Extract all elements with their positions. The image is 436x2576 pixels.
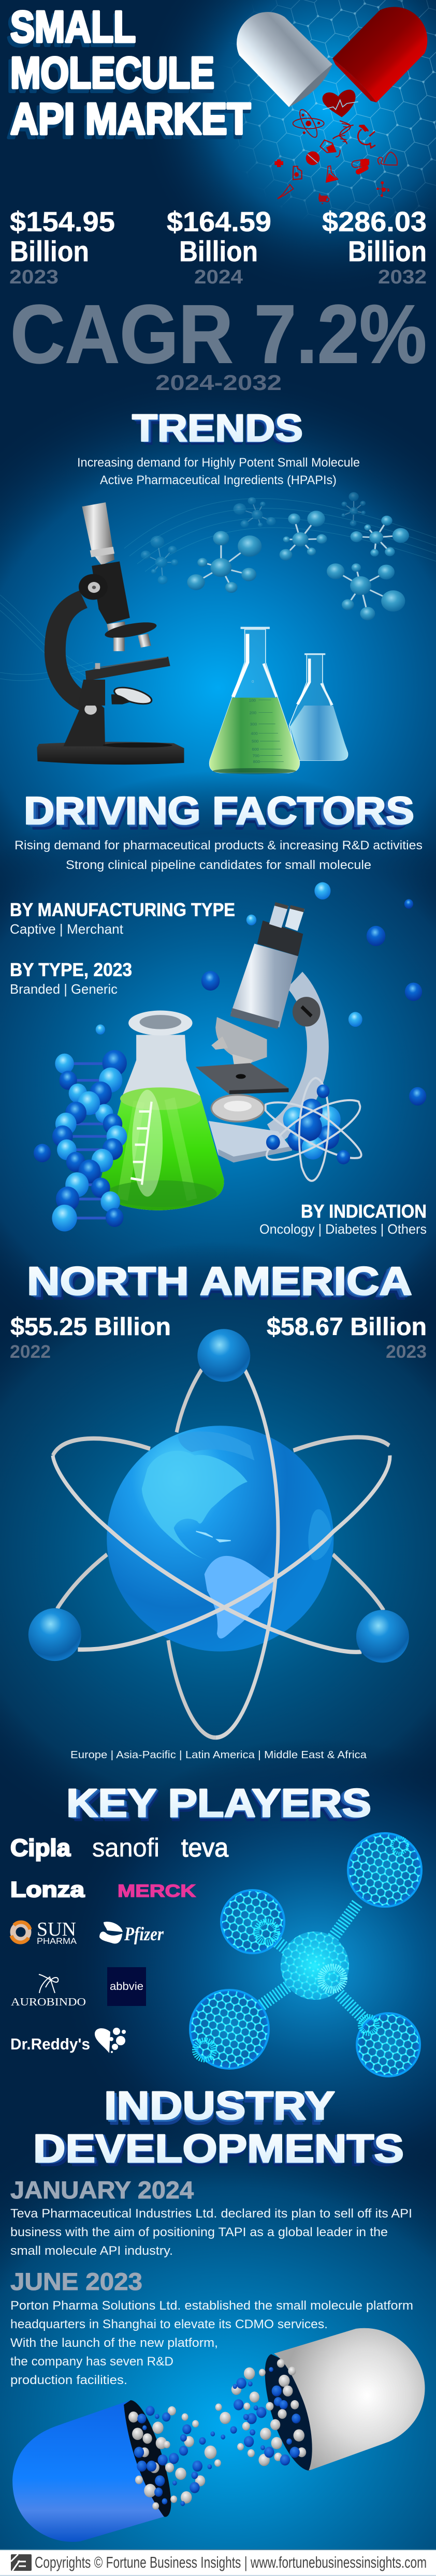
- icon: red capsule half: [332, 7, 427, 102]
- development: january 2024: [10, 2176, 412, 2258]
- flask scale markings: 600: [252, 747, 259, 752]
- icon: microscope: [358, 125, 375, 148]
- driving factors text: Rising demand for pharmaceutical products & increasing R&D activities: [14, 838, 423, 852]
- market value 2024: [167, 206, 271, 288]
- market value 2023: $154.95: [10, 206, 115, 237]
- molecule cluster bright: [187, 511, 409, 620]
- icon: cross: [274, 159, 283, 167]
- mesh bonds: [259, 1904, 370, 2025]
- north america values: [10, 1313, 427, 1362]
- illustration: dna helix: [52, 1050, 127, 1232]
- icon: fortune logo: [11, 2554, 32, 2571]
- trends text: [77, 456, 360, 487]
- icon: tilted flask: [320, 140, 340, 157]
- heading: driving factors: DRIVING FACTORS: [26, 790, 412, 833]
- heading: key players: KEY PLAYERS: [70, 1783, 367, 1826]
- icons: medical symbols spilling from capsule: [274, 89, 397, 204]
- mesh sphere left: [221, 1890, 284, 1953]
- granules: [128, 2359, 306, 2510]
- segment: by type: Branded | Generic: [10, 981, 118, 997]
- illustration: green flask: [100, 1011, 224, 1210]
- market value 2023: [9, 206, 115, 288]
- market value 2023: 2023: [9, 266, 59, 288]
- market value 2032: Billion: [348, 235, 427, 267]
- trends text: Increasing demand for Highly Potent Small Molecule: [77, 456, 360, 470]
- heading: north america: NORTH AMERICA: [27, 1259, 412, 1304]
- hexagon pattern behind pills: [217, 0, 436, 238]
- development: june 2023: headquarters in Shanghai to elevate its CDMO services.: [10, 2317, 328, 2331]
- logo: sanofi: sanofi: [92, 1833, 159, 1862]
- icon: dna helix: [333, 121, 354, 144]
- segment: by indication: [259, 1201, 427, 1237]
- capsule blue half: [12, 2400, 164, 2542]
- flask scale markings: 400: [251, 731, 258, 736]
- hero title: MOLECULE: [10, 49, 214, 98]
- molecule cluster faint: [141, 492, 366, 585]
- development: june 2023: production facilities.: [10, 2373, 127, 2387]
- development: january 2024: JANUARY 2024: [10, 2176, 194, 2204]
- capsule white half: [274, 2328, 425, 2470]
- icon: white capsule half: [237, 12, 332, 107]
- logo: aurobindo: AUROBINDO: [11, 1996, 86, 2008]
- heading: key players: KEY PLAYERS: [72, 1786, 365, 1829]
- mesh sphere bottom right: [357, 2013, 420, 2076]
- flask scale markings: 800: [253, 759, 260, 764]
- hero title: SMALL: [7, 6, 135, 55]
- capsule interior blue: [124, 2400, 171, 2517]
- icon: molecule: [377, 182, 389, 197]
- CAGR callout: 2024-2032: [155, 370, 282, 395]
- development: june 2023: Porton Pharma Solutions Ltd. established the small molecule platform: [10, 2299, 413, 2313]
- illustration: atom model: [266, 1078, 361, 1181]
- heading: industry developments: DEVELOPMENTS: [36, 2128, 401, 2171]
- illustration: open capsule with granules: [12, 2328, 425, 2542]
- logo: merck: MERCK: [118, 1881, 196, 1901]
- icon: stethoscope: [378, 152, 397, 165]
- flask scale markings: [249, 679, 284, 764]
- heading: north america: NORTH AMERICA: [29, 1260, 410, 1304]
- illustration: light microscope: [196, 902, 321, 1162]
- segment: by manufacturing type: [10, 899, 235, 937]
- footer bar: [0, 2549, 436, 2576]
- flask scale markings: 500: [252, 739, 258, 744]
- development: january 2024: Teva Pharmaceutical Industries Ltd. declared its plan to sell off its API: [10, 2207, 412, 2221]
- hero title: MOLECULE: [7, 52, 213, 101]
- icon: bottle: [293, 167, 302, 179]
- development: june 2023: [10, 2268, 413, 2387]
- market value 2024: 2024: [194, 266, 243, 288]
- flask scale markings: 0: [252, 679, 254, 684]
- logo: cipla: Cipla: [10, 1834, 70, 1861]
- icon: capsules: [351, 159, 369, 175]
- mesh sphere center: [281, 1931, 349, 2000]
- logo: abbvie: [107, 1967, 146, 2006]
- market value 2032: 2032: [378, 266, 427, 288]
- hero title: API MARKET: [10, 95, 251, 144]
- heading: industry developments: DEVELOPMENTS: [33, 2126, 404, 2171]
- orbit rings in front of globe: [53, 1370, 390, 1738]
- heading: trends: TRENDS: [132, 407, 303, 450]
- illustration: floating spheres: [34, 882, 426, 1162]
- market value 2032: $286.03: [322, 206, 427, 237]
- development: june 2023: JUNE 2023: [10, 2268, 142, 2295]
- market value 2023: Billion: [10, 235, 89, 267]
- small blue flask: [289, 654, 348, 760]
- logo: teva: teva: [181, 1833, 228, 1862]
- heading: trends: TRENDS: [135, 409, 300, 450]
- segment: by indication: BY INDICATION: [301, 1201, 427, 1222]
- logo: sun pharma: SUN: [37, 1919, 76, 1940]
- orbit rings behind globe: [53, 1370, 389, 1738]
- development: january 2024: small molecule API industry.: [10, 2244, 173, 2258]
- logo: sun pharma: [11, 1919, 77, 1946]
- icon: erlenmeyer flask: [326, 166, 338, 182]
- illustration: globe with atom orbits: [28, 1329, 409, 1738]
- illustration: molecules: [141, 492, 409, 620]
- heading: driving factors: DRIVING FACTORS: [24, 789, 414, 832]
- segment: by type: [10, 959, 132, 997]
- heading: industry developments: DEVELOPMENTS: [39, 2130, 398, 2174]
- logo: lonza: Lonza: [10, 1877, 85, 1901]
- heading: key players: KEY PLAYERS: [66, 1781, 371, 1825]
- logo: dr reddys: [10, 2028, 126, 2053]
- driving factors text: Strong clinical pipeline candidates for small molecule: [66, 858, 371, 872]
- segment: by manufacturing type: Captive | Merchant: [10, 921, 124, 937]
- logo: sun pharma: PHARMA: [37, 1936, 77, 1946]
- segment: by manufacturing type: BY MANUFACTURING TYPE: [10, 899, 235, 920]
- regions list: Europe | Asia-Pacific | Latin America | Middle East & Africa: [70, 1749, 367, 1761]
- driving factors text: [14, 838, 423, 872]
- illustration: black microscope: [37, 502, 184, 765]
- north america values: 2022: [10, 1342, 51, 1362]
- logo: pfizer: [99, 1922, 164, 1945]
- logo: aurobindo: [11, 1974, 86, 2008]
- logo: pfizer: Pfizer: [124, 1924, 164, 1945]
- mesh sphere bottom left: [190, 1990, 269, 2069]
- company logos: [10, 1833, 228, 2053]
- development: june 2023: With the launch of the new platform,: [10, 2336, 218, 2350]
- hero title: SMALL: [10, 3, 136, 52]
- market value 2032: [322, 206, 427, 288]
- development: january 2024: business with the aim of positioning TAPI as a global leader in the: [10, 2225, 388, 2239]
- segment: by indication: Oncology | Diabetes | Others: [259, 1221, 427, 1237]
- mesh sphere top right: [348, 1833, 422, 1907]
- heading: driving factors: DRIVING FACTORS: [28, 792, 410, 834]
- icon: shopping cart: [318, 193, 329, 204]
- large green flask: [210, 628, 299, 774]
- illustration: wave lines: [0, 499, 436, 688]
- heading: industry developments: INDUSTRY: [108, 2089, 331, 2132]
- icon: tablet: [306, 152, 319, 165]
- north america values: $55.25 Billion: [10, 1313, 171, 1341]
- icon: syringe: [278, 185, 294, 199]
- north america values: $58.67 Billion: [267, 1313, 427, 1341]
- illustration: flasks: [210, 628, 348, 774]
- heading: trends: TRENDS: [137, 411, 298, 452]
- orbit spheres: [28, 1329, 409, 1663]
- heading: north america: NORTH AMERICA: [31, 1261, 408, 1305]
- icon: atom: [293, 107, 324, 140]
- market value 2024: $164.59: [167, 206, 271, 237]
- heading: north america: NORTH AMERICA: [34, 1264, 405, 1307]
- logo: dr reddys: Dr.Reddy's: [10, 2035, 90, 2053]
- market value 2024: Billion: [179, 235, 258, 267]
- segment: by type: BY TYPE, 2023: [10, 959, 132, 980]
- heading: industry developments: INDUSTRY: [104, 2084, 335, 2128]
- globe: [107, 1426, 333, 1652]
- logo: abbvie: abbvie: [110, 1981, 143, 1993]
- flask scale markings: 100: [249, 698, 256, 702]
- hero title: API MARKET: [7, 98, 250, 147]
- hero title: [7, 3, 251, 147]
- illustration: mesh molecule: [190, 1833, 422, 2076]
- flask scale markings: 700: [253, 754, 259, 758]
- north america values: 2023: [386, 1342, 427, 1362]
- heading: industry developments: INDUSTRY: [106, 2086, 333, 2130]
- flask scale markings: 300: [250, 722, 257, 726]
- heading: trends: TRENDS: [133, 408, 302, 450]
- heading: driving factors: DRIVING FACTORS: [31, 795, 408, 837]
- capsule interior white: [265, 2354, 317, 2470]
- flask scale markings: 200: [250, 711, 256, 715]
- heading: key players: KEY PLAYERS: [68, 1782, 369, 1826]
- trends text: Active Pharmaceutical Ingredients (HPAPIs): [100, 473, 337, 487]
- development: june 2023: the company has seven R&D: [10, 2355, 173, 2369]
- heading: industry developments: [33, 2084, 404, 2174]
- icon: heart with pulse: [323, 89, 358, 117]
